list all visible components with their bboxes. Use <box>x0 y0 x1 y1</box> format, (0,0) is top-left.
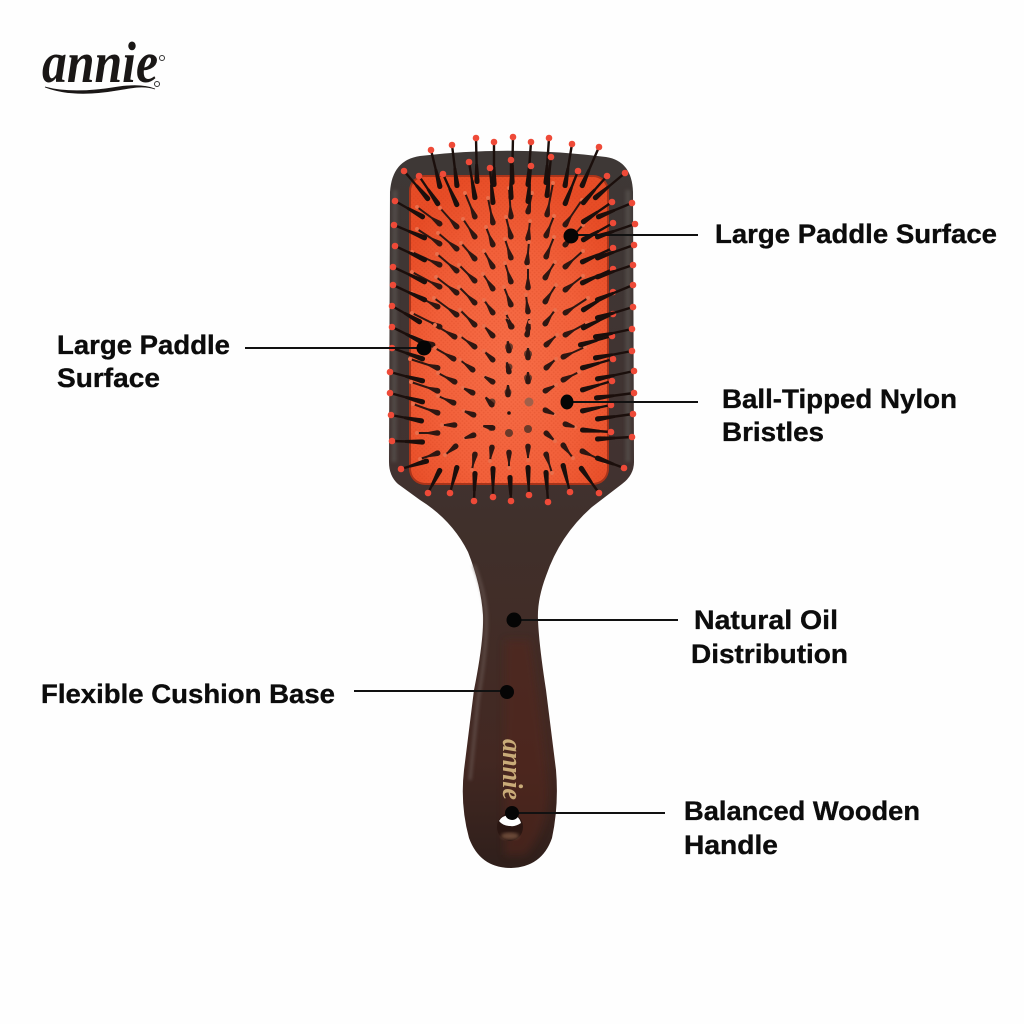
brush body <box>389 151 634 868</box>
callout: flexible cushion base <box>41 679 514 709</box>
callout: large paddle surface (right): Large Paddle Surface <box>715 219 997 249</box>
callout: balanced wooden handle <box>505 796 920 860</box>
callout: flexible cushion base: Flexible Cushion Base <box>41 679 335 709</box>
callout: large paddle surface (left) <box>57 330 432 393</box>
callout: balanced wooden handle: Balanced Wooden <box>684 796 920 826</box>
bristles: outer rows <box>390 137 635 502</box>
callout: large paddle surface (right) <box>564 219 997 249</box>
paddle brush <box>389 137 635 868</box>
callout: balanced wooden handle: Handle <box>684 830 778 860</box>
bristle stubs at centre <box>488 343 534 437</box>
handle logo: annie <box>496 739 528 800</box>
callout: natural oil distribution <box>506 605 848 669</box>
callout: ball-tipped nylon bristles: Bristles <box>722 417 824 447</box>
callout: natural oil distribution: Distribution <box>691 639 848 669</box>
orange cushion pad <box>409 175 609 485</box>
callout: ball-tipped nylon bristles: Ball-Tipped Nylon <box>722 384 957 414</box>
callout: large paddle surface (left): Surface <box>57 363 160 393</box>
handle hole <box>497 813 523 841</box>
logo: Annie: annie <box>42 30 158 95</box>
callout: natural oil distribution: Natural Oil <box>694 605 838 635</box>
callout: ball-tipped nylon bristles <box>560 384 957 447</box>
bristles: inner rows <box>410 183 605 473</box>
callout: large paddle surface (left): Large Paddle <box>57 330 230 360</box>
